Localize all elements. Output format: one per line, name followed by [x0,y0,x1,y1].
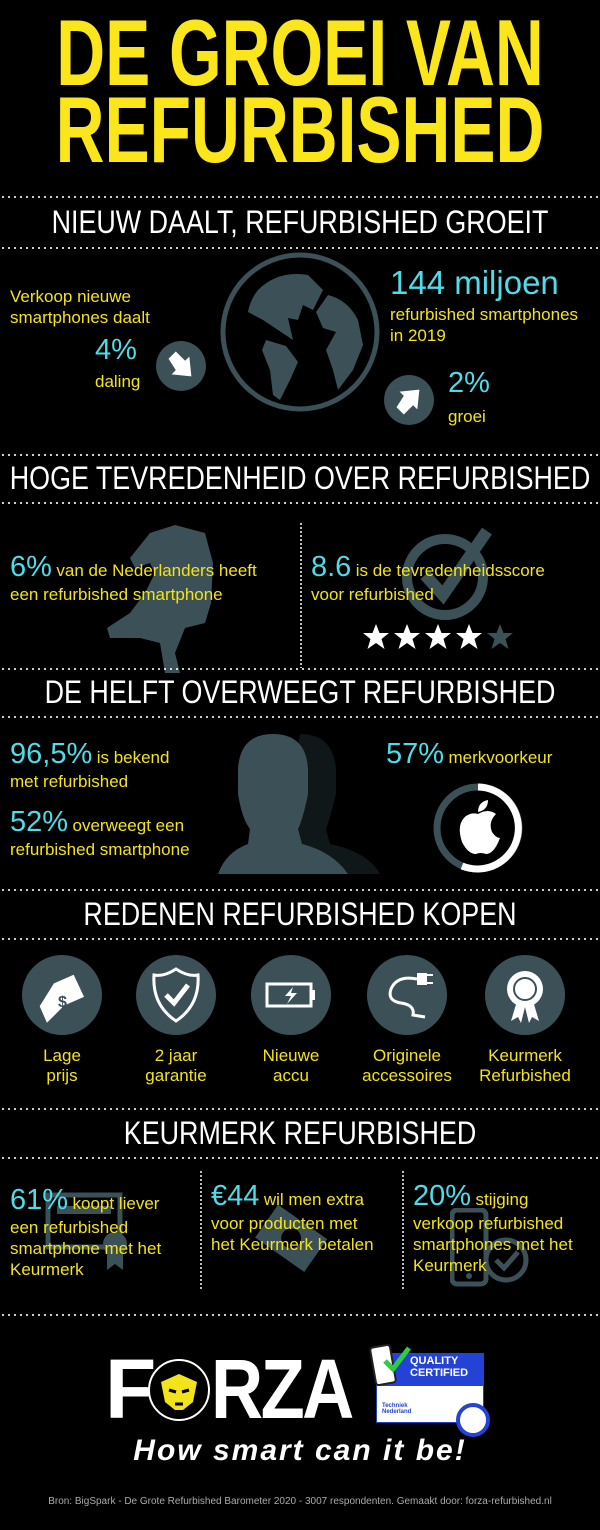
stat: 6%: een refurbished smartphone [10,585,223,604]
stat: €44: het Keurmerk betalen [211,1235,374,1254]
icon: shield [136,955,216,1035]
label: garantie [145,1046,207,1085]
text: verkoop daalt [10,287,150,327]
icon: money [250,1200,330,1280]
logo: forza: RZA [211,1342,352,1436]
text: verkoop daalt: smartphones daalt [10,308,150,327]
label: lage prijs: Lage [43,1046,81,1065]
label: lage prijs [43,1046,81,1085]
icon: check circle [402,528,492,620]
label: accessoires: accessoires [362,1066,452,1085]
tagline: How smart can it be! [133,1434,467,1467]
panel: de helft [10,734,552,874]
icon: charger [367,955,447,1035]
title: DE GROEI VAN [56,0,544,105]
label: keurmerk [479,1046,571,1085]
stat: 2% groei: groei [448,407,486,426]
heading: tevredenheid: HOGE TEVREDENHEID OVER REFURBISHED [10,460,590,496]
stat: 2% groei: 2% [448,367,490,399]
stat: 20%: 20% stijging [413,1180,528,1212]
stat: 8.6: voor refurbished [311,585,434,604]
stat: 20%: Keurmerk [413,1256,487,1275]
stat: 61%: smartphone met het [10,1239,161,1258]
icon: netherlands map [107,525,213,673]
stat: 4% daling: 4% [95,334,137,366]
stat: €44 [211,1180,374,1255]
stat: 6%: 6% van de Nederlanders heeft [10,551,257,583]
title: REFURBISHED [56,77,544,182]
logo: forza [105,1355,357,1425]
label: garantie: garantie [145,1066,207,1085]
stat: 20% [413,1180,573,1276]
stat: €44: voor producten met [211,1214,357,1233]
stat: 61%: 61% koopt liever [10,1184,159,1216]
panel: nieuw daalt [10,252,578,426]
label: keurmerk: Keurmerk [488,1046,562,1065]
label: accessoires [362,1046,452,1085]
stat: 20%: smartphones met het [413,1235,573,1254]
stat: 8.6 [311,551,545,604]
icon: up arrow [384,375,434,425]
panel: redenen [22,955,571,1085]
badge: quality certified [372,1345,494,1433]
icon: battery [251,955,331,1035]
icon: persons [218,734,380,874]
stat: 2% groei [448,367,490,426]
badge: quality certified: QUALITY [410,1355,458,1367]
icon: globe [220,252,380,412]
badge: quality certified: CERTIFIED [410,1367,468,1379]
label: garantie: 2 jaar [155,1046,197,1065]
text: refurbished smartphones 2019: refurbished smartphones [390,305,578,324]
icon: down arrow [156,341,206,391]
icon: certificate [46,1192,127,1270]
stat: 144 miljoen: 144 miljoen [390,264,559,301]
stat: 52%: refurbished smartphone [10,840,190,859]
text: refurbished smartphones 2019 [390,305,578,345]
footer source: Bron: BigSpark - De Grote Refurbished Barometer 2020 - 3007 respondenten. Gemaakt door: forza-refurbished.nl [48,1496,552,1507]
stat: 52% [10,806,190,859]
stat: €44: €44 wil men extra [211,1180,364,1212]
icon: stars [363,624,513,649]
stat: 61% [10,1184,161,1280]
icon: price tag: $ [58,994,67,1011]
panel: keurmerk [10,1180,573,1286]
icon: rosette [485,955,565,1035]
icon: lion [147,1358,211,1422]
label: accu [263,1046,319,1085]
text: refurbished smartphones 2019: in 2019 [390,326,446,345]
stat: 4% daling: daling [95,372,140,391]
stat: 8.6: 8.6 is de tevredenheidsscore [311,551,545,583]
icon: price tag [22,955,102,1035]
badge: quality certified: Nederland [382,1409,411,1415]
heading: keurmerk: KEURMERK REFURBISHED [124,1115,476,1151]
stat: 52%: 52% overweegt een [10,806,184,838]
badge: quality certified: Techniek [382,1403,408,1409]
label: accu: accu [273,1066,309,1085]
stat: 96,5% [10,738,169,791]
stat: 57%: 57% merkvoorkeur [386,738,552,770]
stat: 4% daling [95,334,140,391]
label: accu: Nieuwe [263,1046,319,1065]
stat: 61%: een refurbished [10,1218,128,1237]
label: accessoires: Originele [373,1046,441,1065]
stat: 6% [10,551,257,604]
stat: 96,5%: met refurbished [10,772,128,791]
logo: forza: F [105,1342,156,1436]
label: keurmerk: Refurbished [479,1066,571,1085]
heading: nieuw daalt: NIEUW DAALT, REFURBISHED GROEIT [52,204,548,240]
label: lage prijs: prijs [46,1066,78,1085]
panel: tevredenheid [10,525,545,673]
title [56,0,544,182]
stat: 20%: verkoop refurbished [413,1214,563,1233]
stat: 96,5%: 96,5% is bekend [10,738,169,770]
heading: redenen: REDENEN REFURBISHED KOPEN [83,896,517,932]
heading: de helft: DE HELFT OVERWEEGT REFURBISHED [45,674,555,710]
icon: apple ring [434,784,522,872]
stat: 61%: Keurmerk [10,1260,84,1279]
text: verkoop daalt: Verkoop nieuwe [10,287,131,306]
icon: phone sync [450,1208,540,1288]
